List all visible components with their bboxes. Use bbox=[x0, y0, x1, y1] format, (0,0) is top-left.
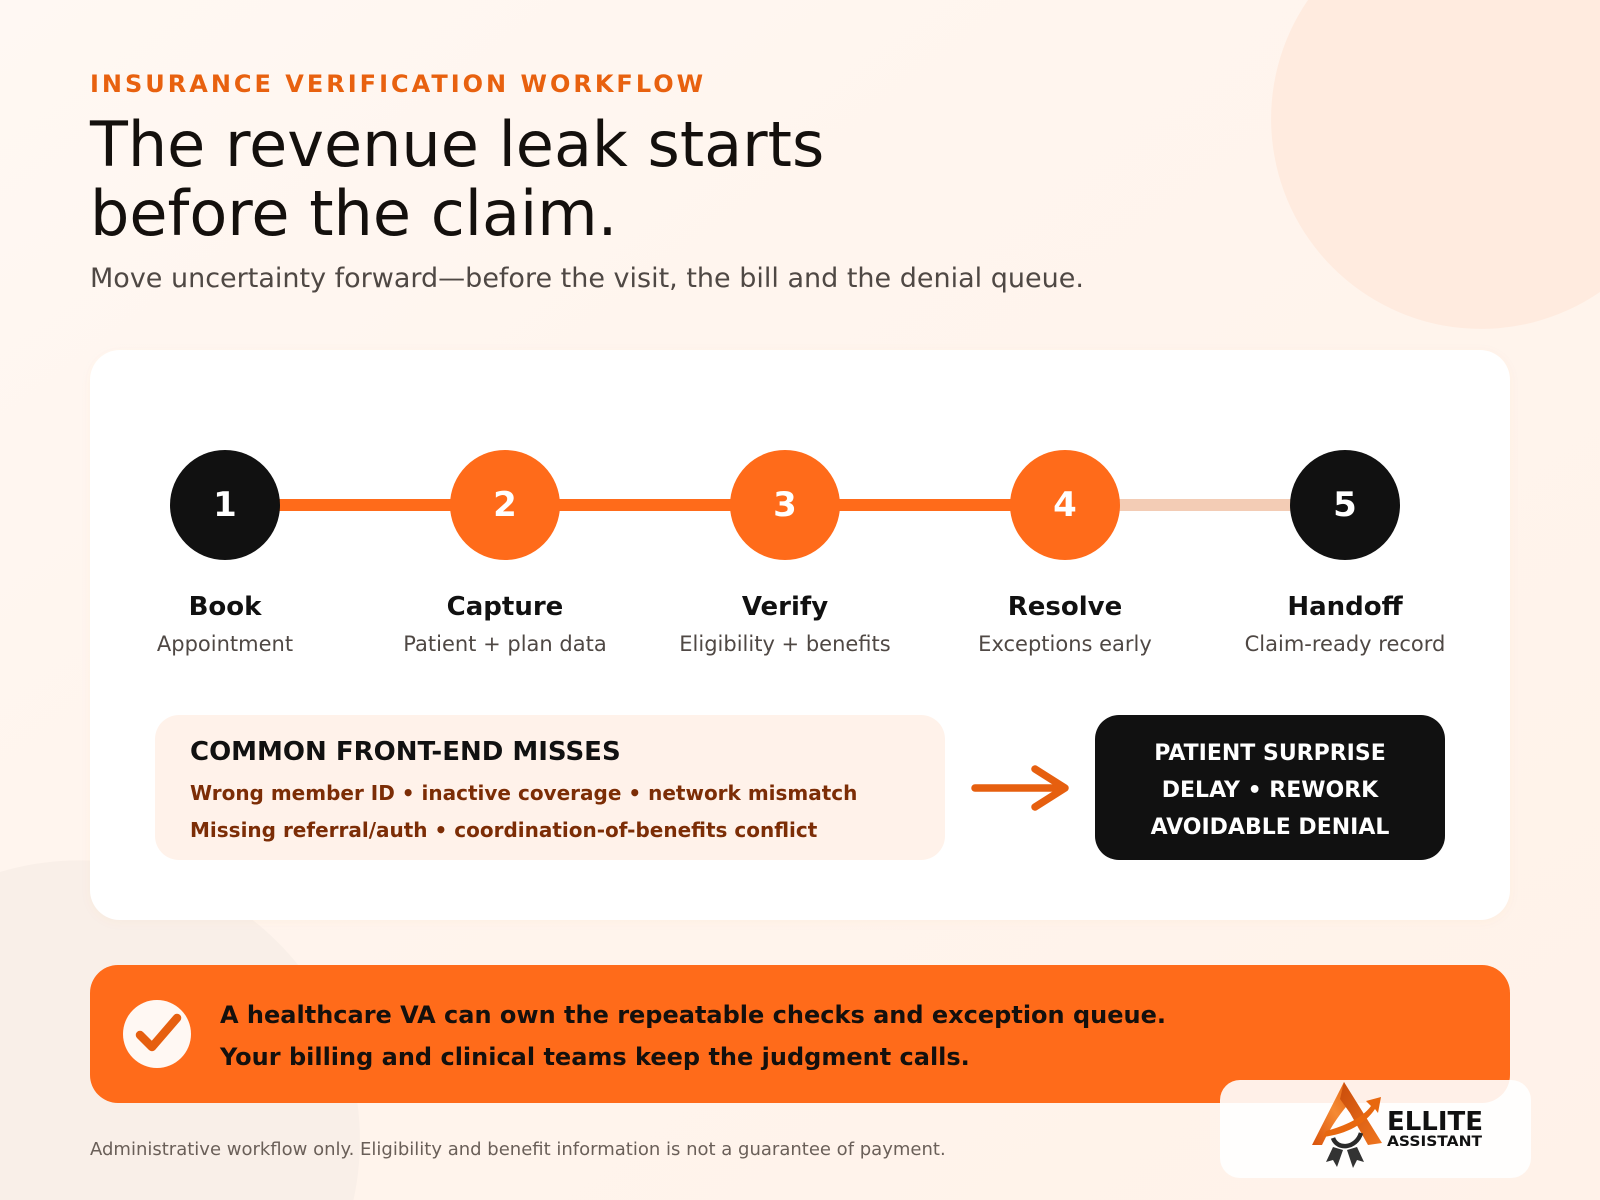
step 4: Resolve bbox=[978, 450, 1152, 656]
step 5: Handoff bbox=[1245, 450, 1445, 656]
callout: consequences: DELAY • REWORK bbox=[1162, 778, 1379, 803]
banner: VA ownership: Your billing and clinical teams keep the judgment calls. bbox=[219, 1043, 970, 1071]
timeline connectors bbox=[225, 499, 1345, 511]
eyebrow: INSURANCE VERIFICATION WORKFLOW bbox=[90, 70, 706, 98]
step 4: Resolve: Exceptions early bbox=[978, 632, 1152, 656]
callout: common front-end misses: COMMON FRONT-END MISSES bbox=[190, 737, 621, 767]
banner: VA ownership bbox=[90, 965, 1510, 1103]
title: before the claim. bbox=[90, 177, 617, 250]
step 5: Handoff: 5 bbox=[1333, 485, 1357, 525]
step 3: Verify: Verify bbox=[742, 592, 828, 622]
callout: consequences: AVOIDABLE DENIAL bbox=[1151, 815, 1389, 840]
callout: consequences: PATIENT SURPRISE bbox=[1154, 741, 1386, 766]
logo: Ellite Assistant: ELLITE bbox=[1387, 1107, 1483, 1137]
step 2: Capture: Patient + plan data bbox=[403, 632, 607, 656]
step 5: Handoff: Handoff bbox=[1287, 592, 1404, 622]
step 4: Resolve: 4 bbox=[1053, 485, 1077, 525]
logo: Ellite Assistant: ASSISTANT bbox=[1387, 1134, 1482, 1150]
step 5: Handoff: Claim-ready record bbox=[1245, 632, 1445, 656]
subtitle: Move uncertainty forward—before the visit, the bill and the denial queue. bbox=[90, 263, 1084, 294]
banner: VA ownership: A healthcare VA can own the repeatable checks and exception queue. bbox=[220, 1001, 1166, 1029]
step 3: Verify: 3 bbox=[773, 485, 797, 525]
footnote: Administrative workflow only. Eligibility and benefit information is not a guarantee of payment. bbox=[90, 1139, 946, 1160]
step 3: Verify bbox=[679, 450, 891, 656]
step 4: Resolve: Resolve bbox=[1008, 592, 1122, 622]
step 1: Book: Book bbox=[189, 592, 262, 622]
callout: common front-end misses: Missing referral/auth • coordination-of-benefits conflict bbox=[190, 818, 818, 842]
callout: consequences bbox=[1095, 715, 1445, 860]
panel: workflow card bbox=[90, 350, 1510, 920]
step 3: Verify: Eligibility + benefits bbox=[679, 632, 891, 656]
step 2: Capture bbox=[403, 450, 607, 656]
step 1: Book: Appointment bbox=[157, 632, 293, 656]
step 2: Capture: 2 bbox=[493, 485, 517, 525]
step 1: Book bbox=[157, 450, 293, 656]
logo: Ellite Assistant bbox=[1220, 1080, 1531, 1178]
icon: check mark bbox=[123, 1000, 191, 1068]
arrow bbox=[975, 769, 1065, 807]
title bbox=[89, 108, 824, 250]
title: The revenue leak starts bbox=[89, 108, 824, 181]
step 2: Capture: Capture bbox=[447, 592, 563, 622]
callout: common front-end misses bbox=[155, 715, 945, 860]
callout: common front-end misses: Wrong member ID • inactive coverage • network mismatch bbox=[190, 781, 857, 805]
step 1: Book: 1 bbox=[213, 485, 237, 525]
